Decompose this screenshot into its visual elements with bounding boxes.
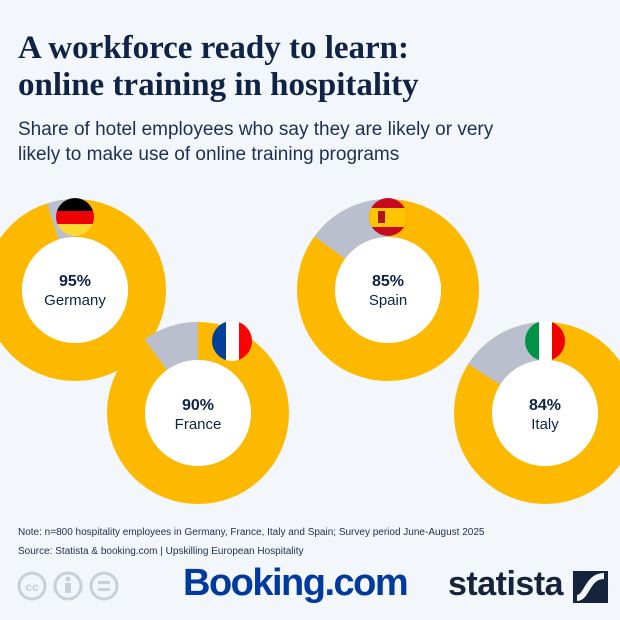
donut: Spain: 85% <box>372 273 404 290</box>
icons: creative commons: cc <box>25 580 39 594</box>
donut: Germany: Germany <box>44 292 106 309</box>
subtitle: Share of hotel employees who say they are likely or very <box>18 119 493 140</box>
title: online training in hospitality <box>18 67 419 103</box>
donut: Germany <box>0 199 166 381</box>
donut: Germany: 95% <box>59 273 91 290</box>
note and source: Note: n=800 hospitality employees in Germany, France, Italy and Spain; Survey period June-August 2025 <box>18 527 484 538</box>
donut: Italy: 84% <box>529 397 561 414</box>
donut: France <box>97 312 299 514</box>
logo: Booking.com: Booking.com <box>183 562 407 604</box>
title: A workforce ready to learn: <box>18 30 409 66</box>
donut: Spain: Spain <box>369 292 407 309</box>
donut: France: France <box>175 416 221 433</box>
icons: creative commons <box>18 572 118 600</box>
flag: Germany <box>56 198 94 237</box>
note and source: Source: Statista & booking.com | Upskilling European Hospitality <box>18 546 304 557</box>
donut: Italy: Italy <box>531 416 559 433</box>
flag: Spain <box>369 198 407 236</box>
donut: Italy <box>446 314 620 512</box>
subtitle <box>18 119 494 165</box>
flag: France <box>212 321 253 361</box>
subtitle: likely to make use of online training programs <box>18 144 399 165</box>
donut: Spain <box>287 189 489 391</box>
donut: France: 90% <box>182 397 214 414</box>
flag: Italy <box>525 321 566 361</box>
donut charts <box>0 198 620 504</box>
note and source <box>18 527 484 557</box>
title <box>18 30 419 103</box>
logo: statista: statista <box>448 565 563 603</box>
